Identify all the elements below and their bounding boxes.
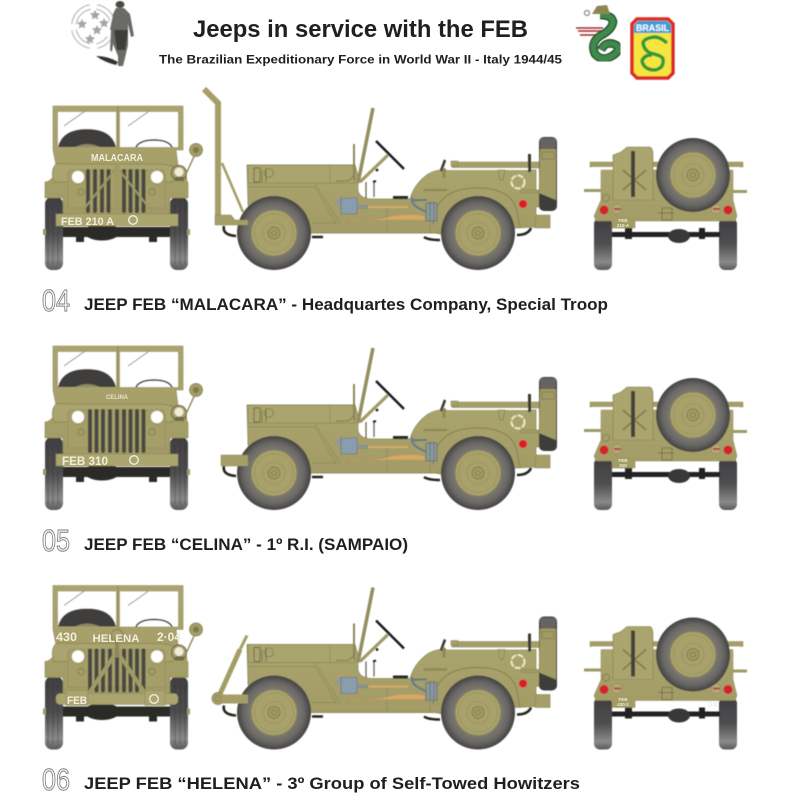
vehicle number 05: 05 [42,523,70,558]
front marking: MALACARA: MALACARA [91,153,143,164]
front marking: CELINA: CELINA [106,394,128,401]
side view: Celina [221,348,557,510]
front plate: FEB 310: FEB 310 [62,456,108,468]
front plate: FEB 210 A: FEB 210 A [61,216,114,228]
patch label: BRASIL [636,23,669,33]
front star circle [129,216,137,224]
row: jeep 05 Celina [42,346,747,558]
front marking: HELENA: HELENA [92,633,140,645]
caption 06: JEEP FEB “HELENA” - 3º Group of Self-Towed Howitzers [84,774,580,793]
icon: star roundel [74,7,112,46]
rear marking: 04: 04 [708,700,717,709]
front view: Malacara [43,106,202,270]
icon: BRASIL shoulder patch [632,19,673,78]
rear plate number: 210-A [617,223,630,228]
side view: Helena with tow bar [212,588,557,750]
caption 04: JEEP FEB “MALACARA” - Headquartes Company, Special Troop [84,295,608,314]
front view: Helena [43,586,202,750]
icon: snake smoking a pipe emblem [576,5,618,59]
front marking: 430: 430 [56,632,77,644]
front star circle [130,456,138,464]
caption 05: JEEP FEB “CELINA” - 1º R.I. (SAMPAIO) [84,535,408,554]
vehicle number 04: 04 [42,283,70,318]
rear view: Celina [584,378,747,510]
row: jeep 04 Malacara [42,89,747,318]
rear view: Malacara [584,138,747,270]
rear plate: FEB [618,697,628,702]
front view: Celina [43,346,202,510]
rear view: Helena [584,618,747,750]
front plate: FEB: FEB [67,695,87,707]
icon: FEB star roundel with walking soldier [74,1,134,66]
vehicle number 06: 06 [42,762,70,797]
rear plate: FEB [618,458,628,463]
front marking: 2·04: 2·04 [157,632,182,644]
front star circle [150,695,158,703]
icon: walking soldier [96,1,134,66]
rear plate number: 310 [619,463,627,468]
patch snake [642,37,667,70]
subtitle: The Brazilian Expeditionary Force in World War II - Italy 1944/45 [159,52,562,66]
rear plate number: 430-2 [617,702,629,707]
side view: Malacara with wire cutter [204,89,557,270]
rear plate: FEB [618,218,628,223]
title: Jeeps in service with the FEB [193,16,528,43]
row: jeep 06 Helena [42,586,747,797]
